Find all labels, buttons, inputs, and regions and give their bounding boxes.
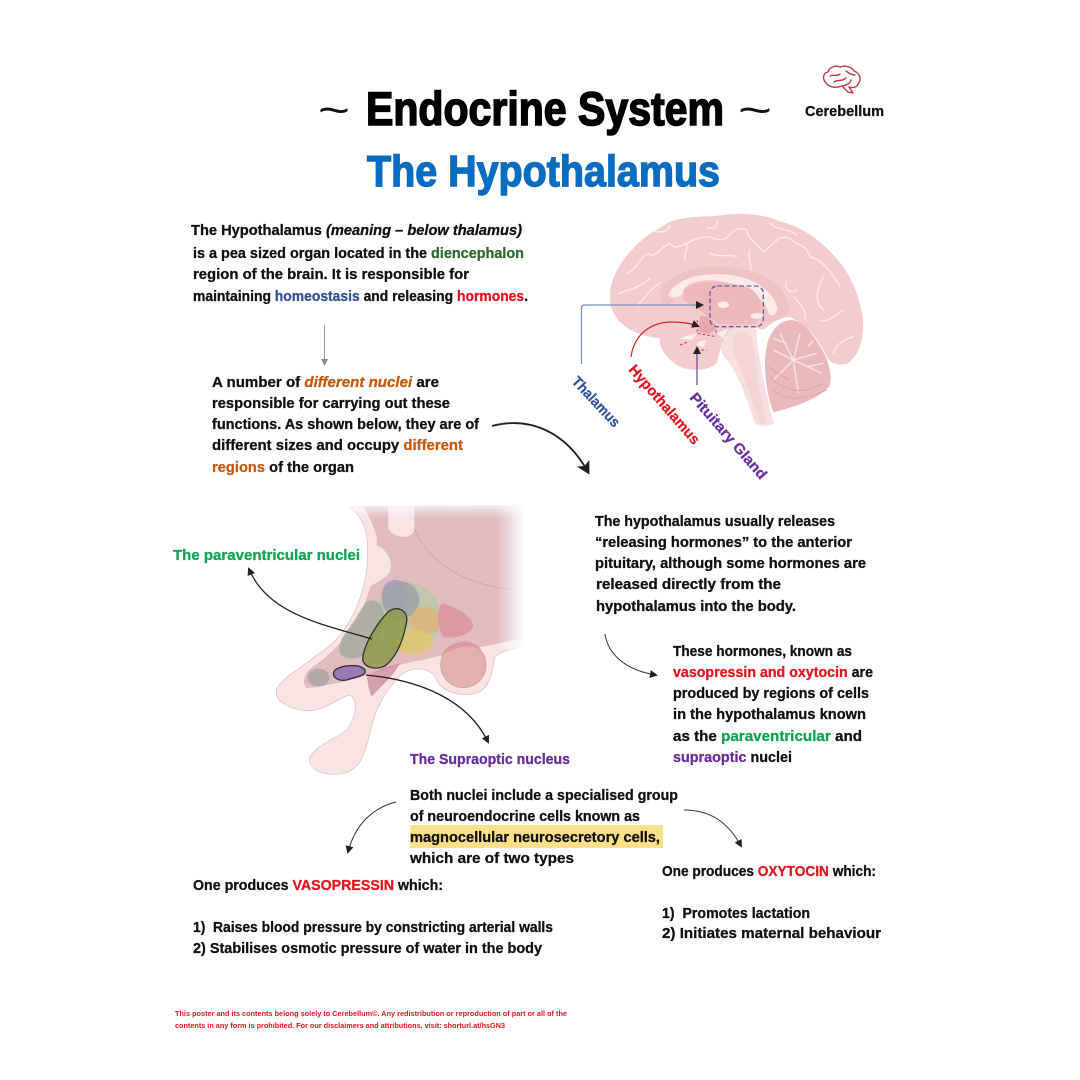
text block: magnocellular cells: which are of two types — [409, 850, 574, 867]
text block: oxytocin effects: 1) Promotes lactation — [662, 905, 810, 922]
text block: oxytocin effects: 2) Initiates maternal behaviour — [662, 925, 881, 942]
text block: oxytocin effects: One produces OXYTOCIN which: — [662, 863, 876, 880]
cerebellum — [765, 320, 831, 412]
title: ~ — [318, 86, 350, 135]
hypothalamus dashes — [680, 320, 716, 350]
text block: vasopressin and oxytocin: produced by regions of cells — [673, 685, 869, 702]
text block: releasing hormones: hypothalamus into the body. — [596, 598, 796, 615]
label: Thalamus: Thalamus — [568, 374, 623, 431]
label: supraoptic nucleus: The Supraoptic nucleus — [410, 751, 570, 768]
text block: different nuclei: A number of different nuclei are — [212, 374, 439, 391]
arrow: nuclei to release text — [492, 423, 588, 472]
icon: Cerebellum brain logo — [824, 66, 860, 93]
pale outer tissue — [276, 505, 533, 774]
connector: pituitary — [696, 348, 698, 385]
subtitle: The Hypothalamus — [367, 147, 720, 196]
text block: hypothalamus definition: maintaining homeostasis and releasing hormones. — [193, 288, 528, 305]
title: Endocrine System — [366, 82, 724, 135]
gyri lines — [618, 220, 853, 353]
nuclei colours — [376, 583, 441, 653]
logo name: Cerebellum — [805, 103, 884, 120]
label: Hypothalamus: Hypothalamus — [625, 362, 703, 448]
text block: oxytocin effects — [662, 863, 881, 942]
text block: different nuclei: regions of the organ — [212, 459, 354, 476]
pink round body — [441, 642, 486, 688]
cingulate ring — [660, 267, 789, 323]
text block: vasopressin effects — [193, 877, 553, 957]
text block: different nuclei: different sizes and occupy different — [212, 437, 463, 454]
connector: hypothalamus — [631, 322, 698, 357]
connector: thalamus — [582, 305, 702, 364]
footer disclaimer: contents in any form is prohibited. For our disclaimers and attributions, visit: shorturl.at/hsGN3 — [175, 1023, 505, 1030]
text block: hypothalamus definition: region of the brain. It is responsible for — [193, 266, 469, 283]
corpus callosum — [668, 274, 777, 315]
arrow: release text to hormones — [605, 634, 656, 675]
text block: different nuclei: functions. As shown below, they are of — [212, 416, 480, 433]
footer disclaimer: This poster and its contents belong solely to Cerebellum©. Any redistribution or reproduction of part or all of the — [175, 1010, 567, 1018]
arrow: to oxytocin — [684, 810, 741, 846]
text block: vasopressin and oxytocin: vasopressin and oxytocin are — [673, 664, 873, 681]
arrow: definition to nuclei — [321, 325, 328, 366]
text block: magnocellular cells — [409, 787, 678, 867]
text block: releasing hormones: released directly from the — [596, 576, 781, 593]
text block: vasopressin and oxytocin: These hormones, known as — [673, 643, 852, 660]
thalamus area — [683, 282, 761, 325]
text block: hypothalamus definition: is a pea sized organ located in the diencephalon — [193, 245, 524, 262]
text block: different nuclei: responsible for carrying out these — [212, 395, 450, 412]
arrow: supraoptic label — [366, 675, 488, 742]
text block: magnocellular cells: Both nuclei include a specialised group — [410, 787, 678, 804]
hypothalamus region — [698, 316, 717, 334]
text block: vasopressin and oxytocin: as the paraventricular and — [673, 728, 862, 745]
label: paraventricular nuclei: The paraventricular nuclei — [173, 547, 360, 564]
text block: vasopressin effects: 2) Stabilises osmotic pressure of water in the body — [193, 940, 543, 957]
text block: magnocellular cells: magnocellular neurosecretory cells, — [410, 829, 660, 846]
text block: releasing hormones: pituitary, although some hormones are — [595, 555, 866, 572]
arrow: paraventricular label — [249, 569, 372, 639]
third ventricle arc — [415, 530, 533, 591]
title: ~ — [738, 86, 772, 135]
text block: vasopressin and oxytocin — [673, 643, 873, 766]
arrow: to vasopressin — [348, 802, 396, 852]
paraventricular nucleus highlight — [363, 609, 407, 668]
text block: vasopressin effects: 1) Raises blood pressure by constricting arterial walls — [193, 919, 553, 936]
supraoptic nucleus highlight — [333, 666, 365, 680]
text block: hypothalamus definition — [191, 222, 528, 305]
text block: vasopressin and oxytocin: in the hypothalamus known — [673, 706, 866, 723]
text block: releasing hormones — [595, 513, 866, 615]
text block: vasopressin effects: One produces VASOPRESSIN which: — [193, 877, 443, 894]
brain illustration — [610, 214, 863, 426]
footer disclaimer — [175, 1010, 567, 1030]
text block: different nuclei — [212, 374, 480, 476]
dark inner tissue — [304, 505, 533, 688]
text block: magnocellular cells: of neuroendocrine cells known as — [410, 808, 640, 825]
text block: hypothalamus definition: The Hypothalamus (meaning – below thalamus) — [191, 222, 522, 239]
text block: releasing hormones: The hypothalamus usually releases — [595, 513, 835, 530]
cerebrum — [610, 214, 863, 370]
dashed thalamus box — [710, 286, 763, 327]
brain stem — [721, 326, 774, 426]
fades — [337, 500, 537, 518]
text block: vasopressin and oxytocin: supraoptic nuclei — [673, 749, 792, 766]
top tab — [388, 507, 414, 537]
hypothalamus nuclei diagram — [276, 500, 538, 774]
text block: releasing hormones: “releasing hormones” to the anterior — [595, 534, 852, 551]
label: Pituitary Gland: Pituitary Gland — [686, 390, 770, 483]
